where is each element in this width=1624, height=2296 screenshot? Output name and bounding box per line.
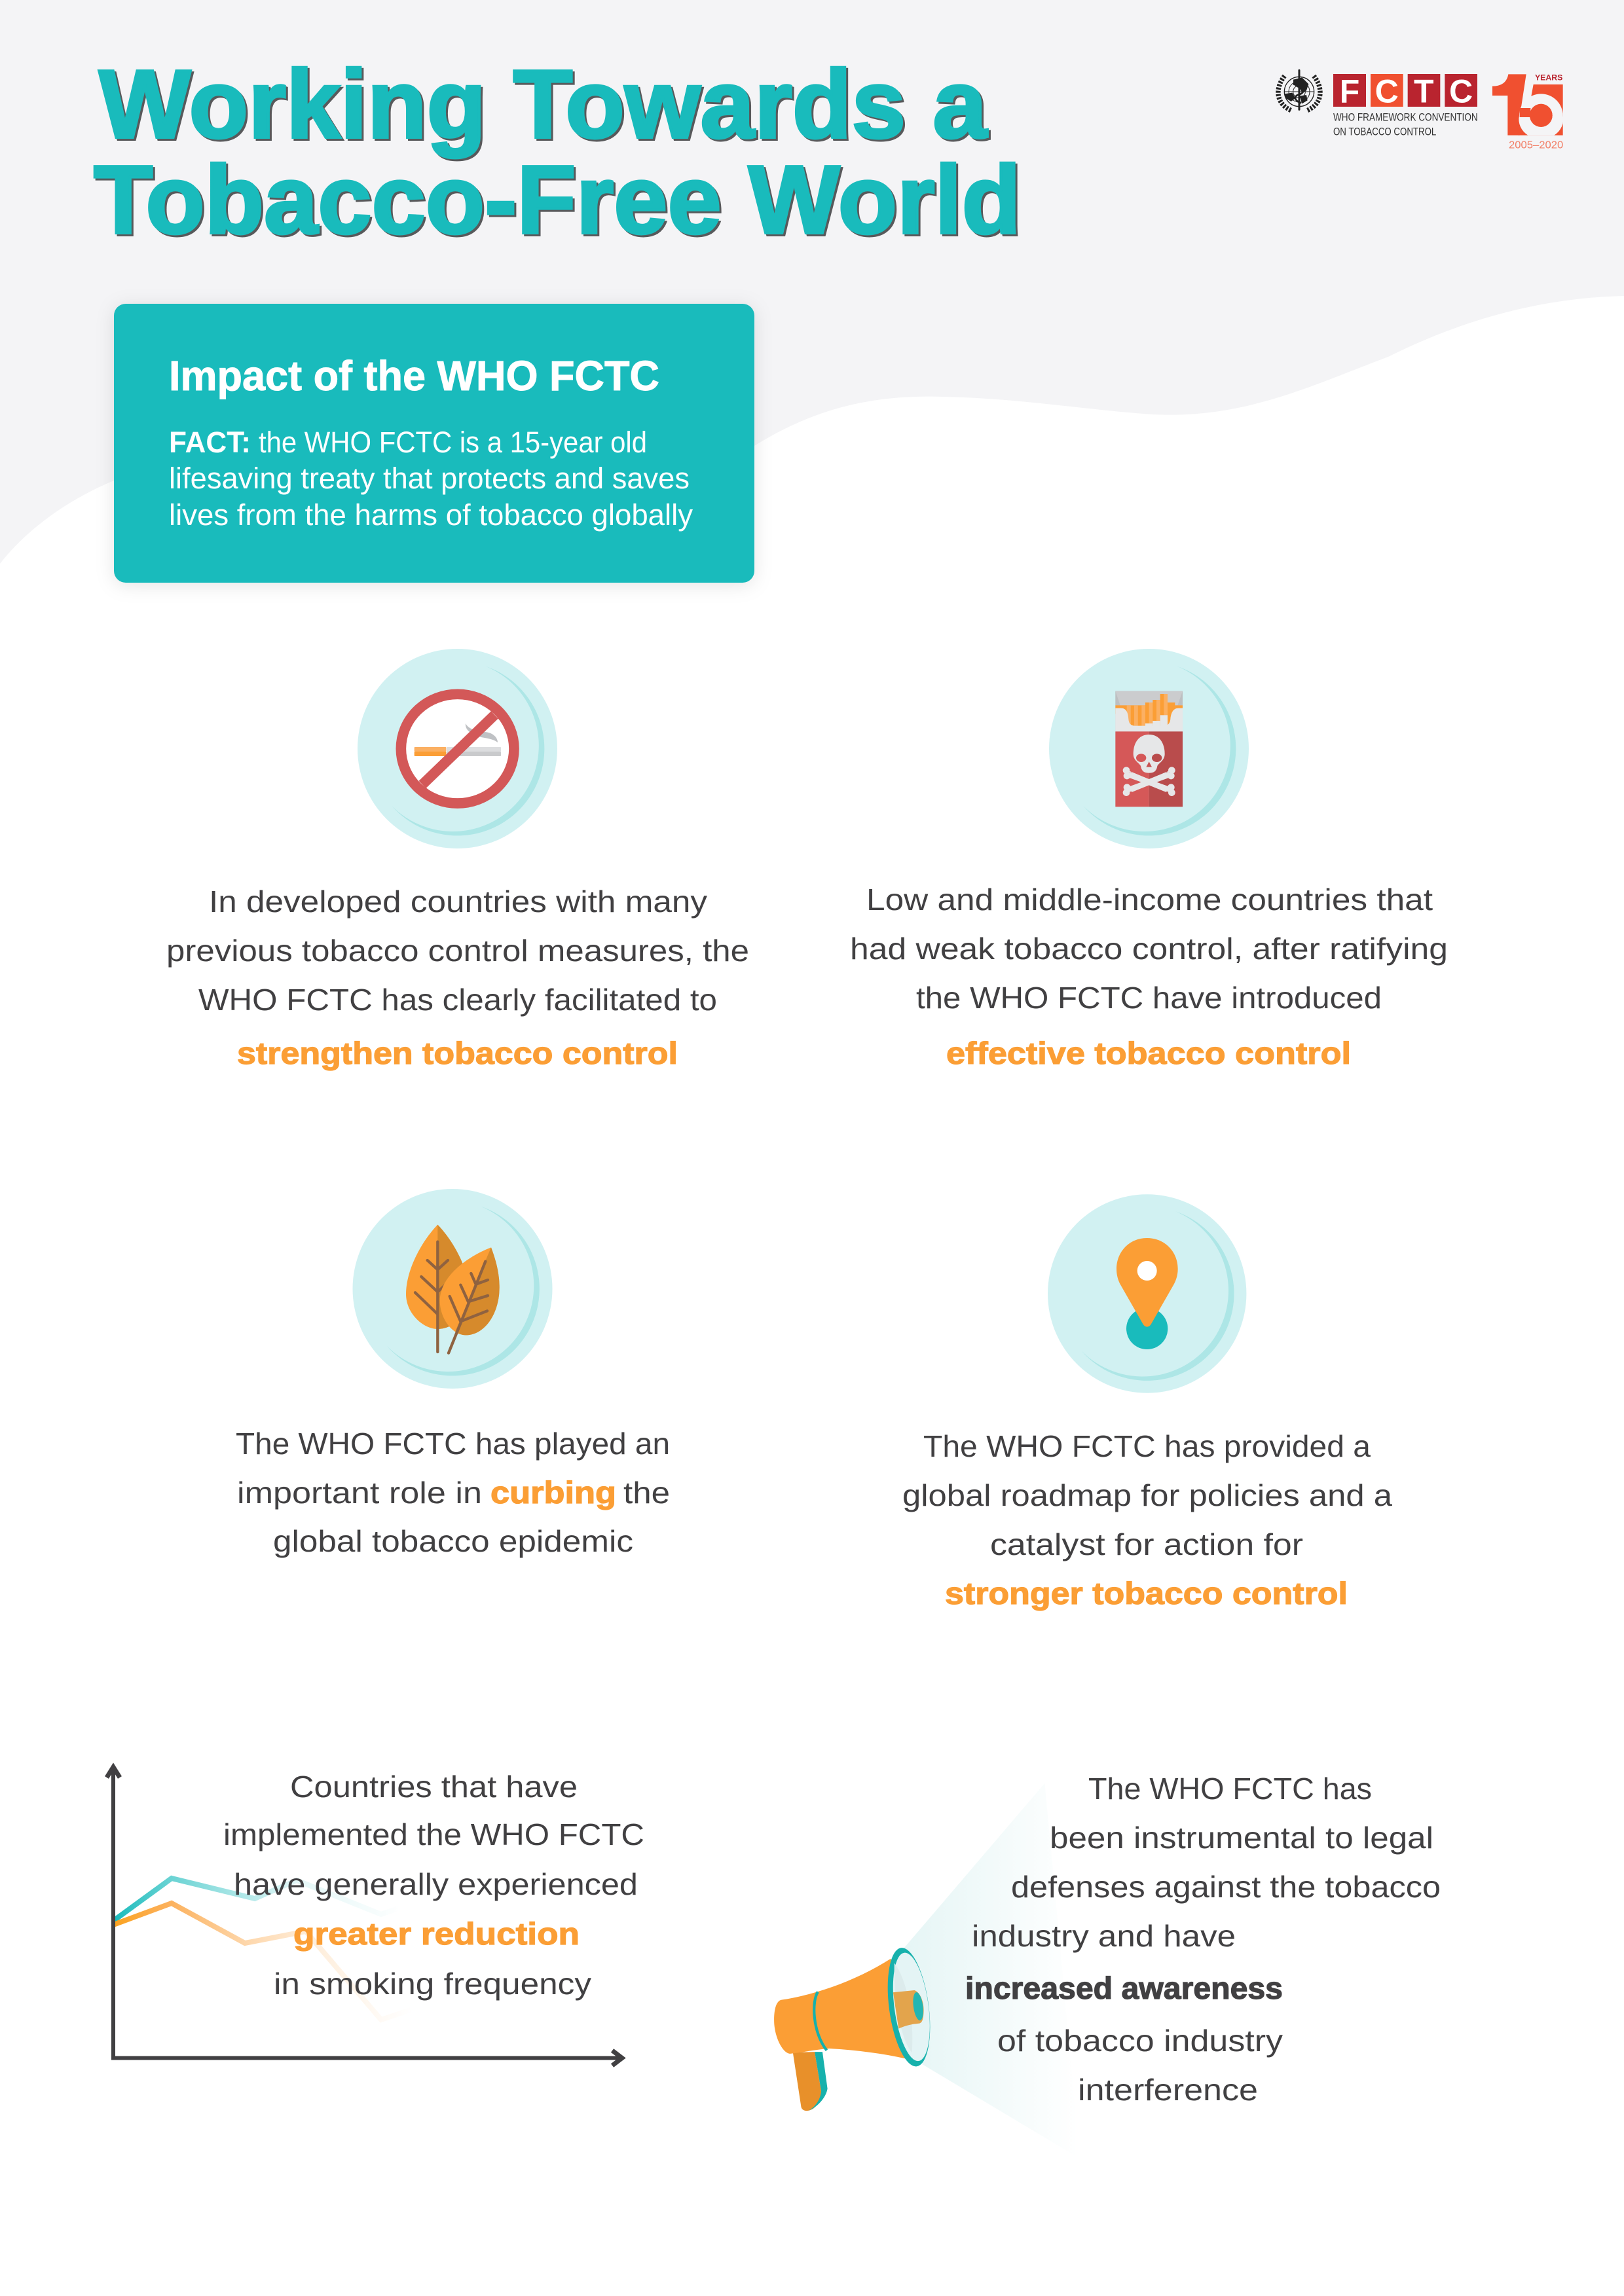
chart axes bbox=[107, 1767, 622, 2066]
text: increased awareness: of tobacco industry bbox=[997, 2024, 1283, 2058]
card heading: Impact of the WHO FCTC bbox=[169, 352, 659, 399]
text: increased awareness: defenses against the tobacco bbox=[1011, 1870, 1441, 1904]
card fact text: lives from the harms of tobacco globally bbox=[169, 498, 693, 532]
icon: no smoking bbox=[358, 649, 557, 848]
icon: WHO emblem bbox=[1278, 70, 1320, 111]
card fact text: the WHO FCTC is a 15-year old bbox=[259, 426, 647, 459]
text: developed countries: WHO FCTC has clearly facilitated to bbox=[198, 983, 717, 1017]
icon: cigarette pack with skull bbox=[1049, 649, 1249, 848]
text: developed countries bbox=[166, 884, 749, 1070]
text: global roadmap: stronger tobacco control bbox=[945, 1576, 1348, 1611]
text: developed countries: In developed countries with many bbox=[209, 884, 707, 919]
FCTC squares: C bbox=[1449, 73, 1473, 109]
card fact text: lifesaving treaty that protects and saves bbox=[169, 462, 690, 495]
text: low and middle-income countries: the WHO FCTC have introduced bbox=[916, 981, 1382, 1015]
text: increased awareness: increased awareness bbox=[965, 1971, 1283, 2005]
text: low and middle-income countries: Low and middle-income countries that bbox=[866, 883, 1433, 917]
text: greater reduction bbox=[223, 1770, 644, 2001]
title: Working Towards a bbox=[99, 50, 988, 158]
icon: tobacco leaves bbox=[352, 1189, 553, 1389]
text: low and middle-income countries: had weak tobacco control, after ratifying bbox=[850, 932, 1448, 966]
text: curbing the epidemic: global tobacco epidemic bbox=[273, 1524, 633, 1558]
card fact text bbox=[169, 426, 693, 532]
text: greater reduction: implemented the WHO FCTC bbox=[223, 1817, 644, 1851]
text: global roadmap bbox=[902, 1429, 1392, 1611]
text: curbing the epidemic: curbing bbox=[490, 1475, 616, 1510]
logos: WHO, FCTC, 15 years bbox=[1278, 70, 1563, 151]
FCTC caption bbox=[1333, 111, 1478, 138]
icon: megaphone with sound beam bbox=[774, 1783, 1080, 2159]
text: curbing the epidemic bbox=[236, 1427, 670, 1558]
text: low and middle-income countries: effective tobacco control bbox=[946, 1036, 1351, 1070]
15 years mark: YEARS bbox=[1535, 73, 1562, 82]
text: increased awareness: interference bbox=[1078, 2073, 1258, 2107]
text: increased awareness bbox=[965, 1772, 1441, 2107]
text: developed countries: previous tobacco control measures, the bbox=[166, 934, 749, 968]
text: curbing the epidemic: important role in bbox=[237, 1476, 482, 1510]
text: increased awareness: been instrumental to legal bbox=[1050, 1821, 1433, 1855]
line chart bbox=[107, 1767, 622, 2066]
text: greater reduction: greater reduction bbox=[293, 1916, 580, 1951]
text: low and middle-income countries bbox=[850, 883, 1448, 1070]
15 years mark: 2005–2020 bbox=[1509, 140, 1563, 151]
text: increased awareness: The WHO FCTC has bbox=[1088, 1772, 1372, 1806]
text: greater reduction: Countries that have bbox=[290, 1770, 578, 1804]
title: Tobacco-Free World bbox=[94, 146, 1021, 254]
text: greater reduction: have generally experienced bbox=[234, 1867, 638, 1901]
FCTC caption: WHO FRAMEWORK CONVENTION bbox=[1333, 111, 1478, 123]
FCTC squares: C bbox=[1375, 73, 1399, 109]
text: global roadmap: catalyst for action for bbox=[990, 1527, 1303, 1561]
background wave bbox=[0, 0, 1624, 564]
FCTC squares: F bbox=[1340, 73, 1359, 109]
card fact text: FACT: bbox=[169, 426, 251, 459]
chart line: teal series bbox=[113, 1878, 400, 1921]
text: increased awareness: industry and have bbox=[972, 1919, 1236, 1953]
title bbox=[94, 50, 1021, 254]
text: developed countries: strengthen tobacco control bbox=[237, 1036, 678, 1070]
FCTC squares: T bbox=[1414, 73, 1434, 109]
FCTC caption: ON TOBACCO CONTROL bbox=[1333, 126, 1436, 138]
text: greater reduction: in smoking frequency bbox=[274, 1967, 591, 2001]
FCTC squares bbox=[1333, 73, 1477, 109]
text: global roadmap: global roadmap for policies and a bbox=[902, 1478, 1392, 1512]
15 years mark bbox=[1492, 73, 1563, 151]
icon: location pin bbox=[1048, 1194, 1246, 1393]
text: global roadmap: The WHO FCTC has provided a bbox=[923, 1429, 1371, 1463]
text: curbing the epidemic: The WHO FCTC has played an bbox=[236, 1427, 670, 1461]
chart line: orange series bbox=[113, 1903, 411, 2020]
text: curbing the epidemic: the bbox=[623, 1476, 670, 1510]
panel: impact fact card bbox=[114, 304, 754, 583]
